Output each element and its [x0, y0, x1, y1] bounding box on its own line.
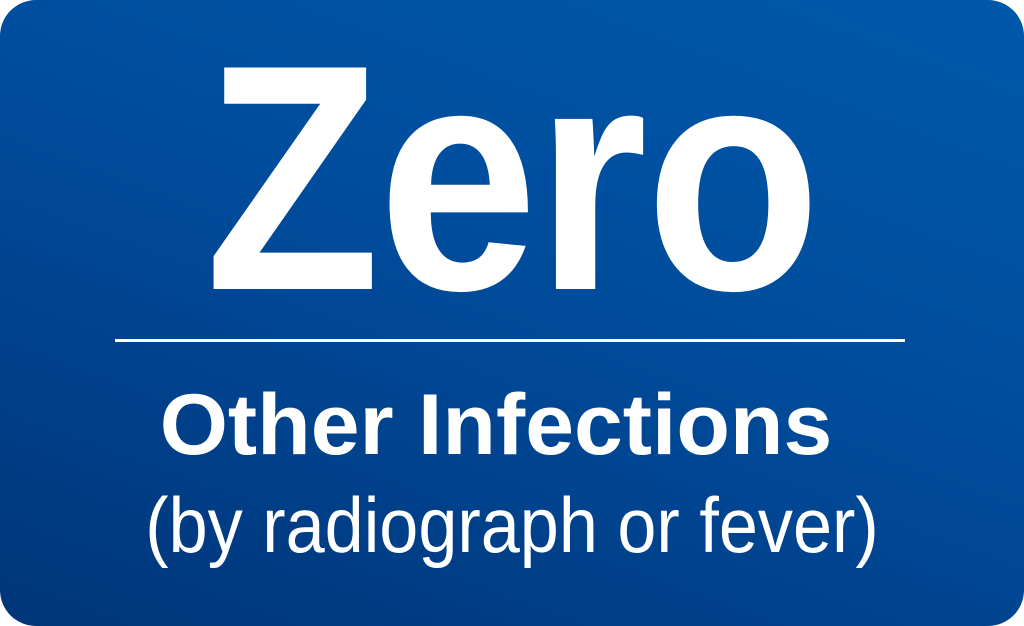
- divider line: [115, 339, 905, 342]
- text: by radiograph or fever: (by radiograph or fever): [145, 481, 879, 569]
- heading: Zero: Zero: [205, 0, 819, 358]
- subheading: Other Infections: Other Infections: [160, 377, 832, 473]
